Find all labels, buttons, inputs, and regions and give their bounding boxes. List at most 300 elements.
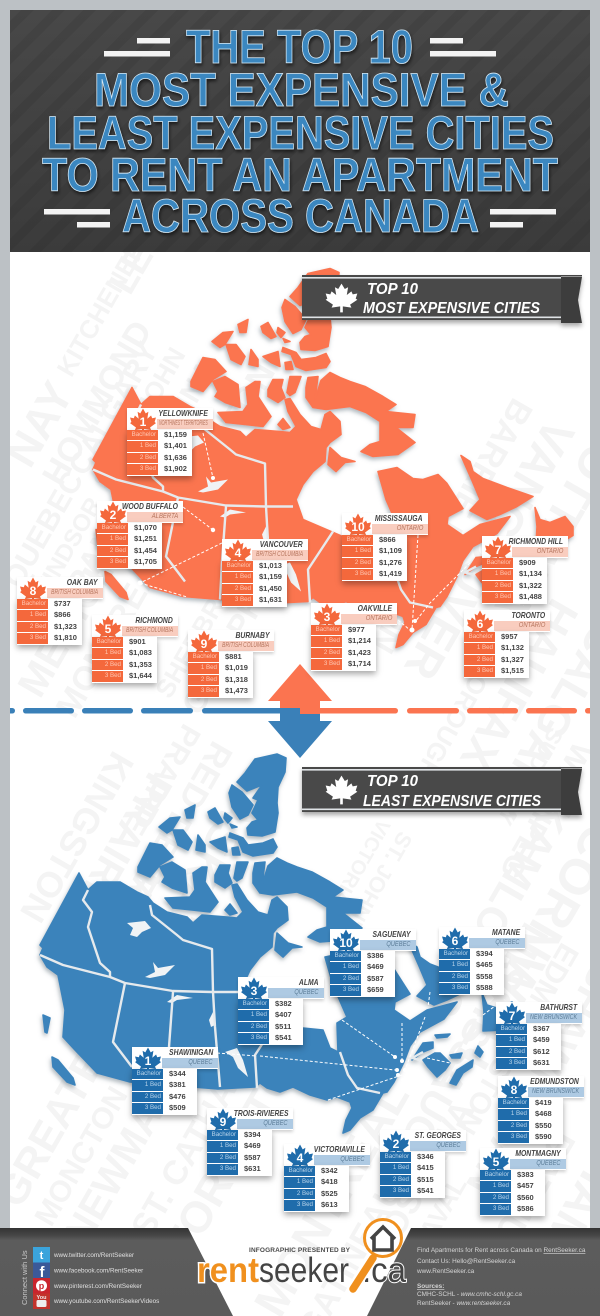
card: Bathurst	[492, 1002, 584, 1076]
card: Richmond: Bachelor	[97, 638, 121, 645]
card: Mississauga: ONTARIO	[396, 525, 423, 532]
card: Vancouver: 2 Bed	[235, 585, 251, 592]
banner: most expensive	[302, 275, 582, 323]
card: Oakville: $977	[348, 625, 365, 634]
dashed divider	[4, 708, 597, 714]
card: Vancouver: 1 Bed	[235, 573, 251, 580]
card: Matane: QUEBEC	[496, 939, 520, 946]
card: Edmundston	[494, 1076, 586, 1148]
card: Trois-Rivieres: $587	[244, 1153, 261, 1162]
card: Richmond: $901	[129, 637, 146, 646]
icon: youtube	[33, 1294, 50, 1309]
card: St. Georges: 1 Bed	[393, 1164, 409, 1171]
footer contact and sources text: CMHC-SCHL - www.cmhc-schl.gc.ca	[417, 1291, 522, 1298]
icon: youtube: You	[37, 1295, 46, 1301]
watermark of city names: HOMMOND	[35, 314, 160, 492]
card: Yellowknife: 2 Bed	[140, 454, 156, 461]
icon: twitter	[33, 1247, 50, 1262]
card: St. Georges: $346	[417, 1152, 434, 1161]
footer right panel	[367, 1228, 600, 1316]
card: Richmond Hill: 1 Bed	[495, 570, 511, 577]
card: Yellowknife: Bachelor	[132, 431, 156, 438]
banner: most expensive: TOP 10	[367, 281, 418, 298]
card: Shawinigan: $476	[169, 1092, 186, 1101]
watermark of city names: VICTORIA	[327, 816, 394, 909]
card: Wood Buffalo: 2 Bed	[110, 547, 126, 554]
arrow up, orange	[268, 664, 332, 714]
card: Victoriaville: $418	[321, 1177, 338, 1186]
card: Richmond: 2 Bed	[105, 661, 121, 668]
card: Saguenay: $587	[367, 974, 384, 983]
card: Richmond: RICHMOND	[136, 615, 173, 625]
card: St. Georges: 2 Bed	[393, 1176, 409, 1183]
card: Wood Buffalo: 1 Bed	[110, 535, 126, 542]
card: Yellowknife: $1,902	[164, 464, 187, 473]
watermark of city names: CALGARY	[62, 337, 165, 481]
logo: rentseeker.ca: seeker	[259, 1251, 349, 1290]
card: Richmond: 5	[105, 622, 111, 636]
card: Yellowknife: $1,401	[164, 441, 187, 450]
card: Saguenay: 2 Bed	[343, 975, 359, 982]
card: Matane: $465	[476, 960, 493, 969]
card: Wood Buffalo	[93, 501, 184, 576]
card: Bathurst: Bachelor	[501, 1025, 525, 1032]
card: Yellowknife	[123, 408, 214, 483]
card: Vancouver	[218, 539, 310, 614]
card: St. Georges: QUEBEC	[437, 1142, 461, 1149]
card: Burnaby	[184, 630, 276, 705]
watermark of city names: SAINT JOHN	[87, 342, 191, 493]
title: THE TOP 10	[186, 20, 413, 73]
card: Shawinigan	[128, 1047, 220, 1122]
card: Saguenay: SAGUENAY	[373, 929, 411, 939]
watermark of city names: MONCTON	[29, 1081, 134, 1232]
card: Trois-Rivieres: TROIS-RIVIERES	[233, 1108, 288, 1118]
icon: twitter: t	[40, 1250, 44, 1262]
city dots, blue map	[393, 1055, 407, 1082]
card: Edmundston: $468	[535, 1109, 552, 1118]
card: Richmond: BRITISH COLUMBIA	[126, 627, 173, 634]
watermark of city names: ST. CATHARINES	[124, 983, 296, 1244]
footer left panel	[0, 1228, 233, 1316]
logo: rentseeker.ca: rent	[197, 1251, 259, 1290]
card: Montmagny: $383	[517, 1170, 534, 1179]
card: Wood Buffalo: WOOD BUFFALO	[122, 501, 178, 511]
watermark of city names: REGINA	[137, 354, 224, 472]
card: Oak Bay: $1,323	[54, 622, 77, 631]
card: Oak Bay: $737	[54, 599, 71, 608]
card: Victoriaville	[280, 1144, 372, 1219]
social links: www.twitter.com/RentSeeker	[53, 1252, 134, 1259]
card: Edmundston: $419	[535, 1098, 552, 1107]
card: Saguenay	[326, 929, 418, 1004]
card: Victoriaville: 4	[297, 1150, 303, 1164]
watermark of city names: KITCHENER	[51, 235, 152, 381]
icon: facebook: f	[40, 1264, 46, 1281]
card: Bathurst: $459	[533, 1035, 550, 1044]
card: Edmundston: EDMUNDSTON	[530, 1076, 579, 1086]
watermark of city names: EDMUNDSTON	[449, 938, 585, 1140]
icon: pinterest	[33, 1278, 50, 1294]
card: Matane: 3 Bed	[452, 984, 468, 991]
card: Bathurst: $612	[533, 1047, 550, 1056]
card: Mississauga: $1,276	[379, 558, 402, 567]
card: Alma: $541	[275, 1033, 292, 1042]
card: Montmagny: $560	[517, 1193, 534, 1202]
card: Matane: $588	[476, 983, 493, 992]
card: Matane: $394	[476, 949, 493, 958]
card: Victoriaville: VICTORIAVILLE	[314, 1144, 365, 1154]
card: Toronto: $1,515	[501, 666, 524, 675]
card: Alma: ALMA	[299, 977, 319, 987]
card: Richmond Hill: $909	[519, 558, 536, 567]
card: Toronto: $1,132	[501, 643, 524, 652]
title decoration bars	[44, 38, 556, 228]
card: Wood Buffalo: $1,251	[134, 534, 157, 543]
card: Trois-Rivieres: $394	[244, 1130, 261, 1139]
card: Bathurst: 3 Bed	[509, 1059, 525, 1066]
watermark of city names: SUDBURY	[492, 724, 568, 830]
logo: rentseeker.ca	[197, 1251, 406, 1290]
card: Oakville	[307, 603, 398, 678]
card: Burnaby: 1 Bed	[201, 664, 217, 671]
social links	[53, 1252, 159, 1305]
card: Bathurst: 2 Bed	[509, 1048, 525, 1055]
card: Vancouver: $1,013	[259, 561, 282, 570]
watermark of city names	[10, 252, 590, 1316]
card: Yellowknife: 1	[140, 414, 146, 428]
card: Yellowknife: $1,636	[164, 453, 187, 462]
watermark of city names: LETHBRIDGE	[101, 66, 261, 301]
card: Vancouver: VANCOUVER	[260, 539, 303, 549]
left and right page edge strips	[0, 690, 600, 1228]
card: Burnaby: $1,473	[225, 686, 248, 695]
card: Vancouver: 3 Bed	[235, 596, 251, 603]
card: Burnaby: BRITISH COLUMBIA	[222, 642, 269, 649]
card: Richmond Hill: 7	[495, 542, 501, 556]
icon: facebook	[33, 1262, 50, 1281]
card: Shawinigan: QUEBEC	[189, 1059, 213, 1066]
card: Alma: Bachelor	[243, 1000, 267, 1007]
card: Montmagny: $586	[517, 1204, 534, 1213]
card: Toronto: $957	[501, 632, 518, 641]
card: Montmagny: 3 Bed	[493, 1205, 509, 1212]
watermark of city names: VANCOUVER	[395, 411, 585, 689]
card: Yellowknife: $1,159	[164, 430, 187, 439]
card: Alma: 3 Bed	[251, 1034, 267, 1041]
watermark of city names: ST. JOHN'S	[336, 828, 417, 943]
card: Oak Bay: BRITISH COLUMBIA	[51, 589, 98, 596]
social links: www.facebook.com/RentSeeker	[53, 1268, 143, 1274]
card: Saguenay: 10	[339, 936, 353, 950]
card: Edmundston: $550	[535, 1121, 552, 1130]
card: Toronto: 1 Bed	[477, 644, 493, 651]
orange map of Canada	[93, 268, 573, 648]
footer contact and sources text	[416, 1247, 586, 1307]
card: Edmundston: 2 Bed	[511, 1122, 527, 1129]
card: Oakville: $1,714	[348, 659, 371, 668]
footer contact and sources text: Find Apartments for Rent across Canada on RentSeeker.ca	[417, 1247, 586, 1254]
watermark of city names: MISSISSAUGA	[378, 916, 556, 1180]
card: Richmond Hill: $1,134	[519, 569, 542, 578]
card: St. Georges	[376, 1130, 468, 1205]
card: Alma: 2 Bed	[251, 1023, 267, 1030]
card: Richmond Hill: $1,488	[519, 592, 542, 601]
card: Saguenay: $469	[367, 962, 384, 971]
card: Oakville: Bachelor	[316, 626, 340, 633]
card: Oak Bay: $1,810	[54, 633, 77, 642]
watermark of city names: SASKATOON	[89, 754, 286, 1043]
title: MOST EXPENSIVE &	[94, 63, 509, 116]
watermark of city names: RED DEER	[119, 735, 240, 906]
card: Vancouver: $1,631	[259, 595, 282, 604]
watermark of city names: EDMONTON	[151, 356, 283, 546]
card: Mississauga	[338, 513, 430, 588]
card: Burnaby: BURNABY	[235, 630, 269, 640]
card: St. Georges: $541	[417, 1186, 434, 1195]
card: Oakville: 1 Bed	[324, 637, 340, 644]
social links: www.pinterest.com/RentSeeker	[53, 1283, 142, 1290]
card: Montmagny: 5	[493, 1154, 499, 1168]
card: Vancouver: $1,450	[259, 584, 282, 593]
card: Vancouver: $1,159	[259, 572, 282, 581]
card: Trois-Rivieres: $631	[244, 1164, 261, 1173]
card: Saguenay: QUEBEC	[387, 941, 411, 948]
icon: pinterest: p	[39, 1281, 45, 1291]
card: Toronto: ONTARIO	[518, 622, 545, 629]
card: Alma: 1 Bed	[251, 1011, 267, 1018]
card: Victoriaville: 2 Bed	[297, 1190, 313, 1197]
card: Oakville: OAKVILLE	[358, 603, 392, 613]
card: Trois-Rivieres: 2 Bed	[220, 1154, 236, 1161]
card: St. Georges: $415	[417, 1163, 434, 1172]
card: Mississauga: 1 Bed	[355, 547, 371, 554]
card: Yellowknife: YELLOWKNIFE	[159, 408, 208, 418]
card: Montmagny: MONTMAGNY	[516, 1148, 561, 1158]
card: Richmond Hill: $1,322	[519, 581, 542, 590]
watermark of city names: SHERBROOKE	[149, 527, 268, 703]
dashed leader lines, blue map	[217, 992, 495, 1100]
card: Yellowknife: 1 Bed	[140, 442, 156, 449]
card: Oak Bay: OAK BAY	[67, 577, 98, 587]
card: Edmundston: 3 Bed	[511, 1133, 527, 1140]
card: Saguenay: $659	[367, 985, 384, 994]
card: Oakville: 2 Bed	[324, 649, 340, 656]
blue map of Canada	[40, 754, 520, 1133]
card: Shawinigan: $381	[169, 1080, 186, 1089]
watermark of city names: BRANDON	[46, 455, 166, 624]
card: Matane: 1 Bed	[452, 961, 468, 968]
card: Richmond: $1,644	[129, 671, 152, 680]
card: Toronto: $1,327	[501, 655, 524, 664]
card: Matane	[435, 927, 526, 1002]
banner: least expensive: LEAST EXPENSIVE CITIES	[363, 793, 542, 810]
card: Edmundston: 8	[511, 1082, 517, 1096]
card: Saguenay: $386	[367, 951, 384, 960]
card: Oakville: ONTARIO	[365, 615, 392, 622]
card: Vancouver: 4	[235, 546, 241, 560]
card: Bathurst: BATHURST	[540, 1002, 577, 1012]
card: Montmagny: QUEBEC	[537, 1160, 561, 1167]
card: Bathurst: 1 Bed	[509, 1036, 525, 1043]
watermark of city names: HALIFAX	[451, 591, 587, 779]
social links: www.youtube.com/RentSeekerVideos	[53, 1298, 159, 1305]
card: Bathurst: 7	[509, 1008, 515, 1022]
card: Edmundston: NEW BRUNSWICK	[532, 1088, 579, 1095]
card: Richmond Hill: RICHMOND HILL	[509, 536, 563, 546]
card: Saguenay: 3 Bed	[343, 986, 359, 993]
card: Trois-Rivieres: 3 Bed	[220, 1165, 236, 1172]
watermark of city names: OSHAWA	[374, 1094, 482, 1244]
watermark of city names: KINGSTON	[12, 745, 142, 929]
watermark of city names: LAVAL	[405, 1171, 473, 1258]
banner: least expensive: TOP 10	[367, 773, 418, 790]
card: St. Georges: 3 Bed	[393, 1187, 409, 1194]
card: Mississauga: MISSISSAUGA	[375, 513, 423, 523]
card: Montmagny: Bachelor	[485, 1171, 509, 1178]
card: Matane: Bachelor	[444, 950, 468, 957]
footer contact and sources text: Sources:	[417, 1283, 444, 1290]
card: Trois-Rivieres: $469	[244, 1141, 261, 1150]
card: Richmond: 3 Bed	[105, 672, 121, 679]
card: Wood Buffalo: 2	[110, 508, 116, 522]
card: Toronto: 2 Bed	[477, 656, 493, 663]
card: Shawinigan: Bachelor	[137, 1070, 161, 1077]
card: Oak Bay: $866	[54, 610, 71, 619]
card: Oakville: $1,214	[348, 636, 371, 645]
card: Matane: 6	[452, 934, 458, 948]
card: Alma: $511	[275, 1022, 291, 1031]
card: Vancouver: Bachelor	[227, 562, 251, 569]
card: Toronto: 3 Bed	[477, 667, 493, 674]
watermark of city names: GUELPH	[174, 587, 272, 720]
card: Oak Bay: 2 Bed	[30, 623, 46, 630]
card: Toronto	[460, 610, 552, 685]
card: Mississauga: 2 Bed	[355, 559, 371, 566]
card: Matane: $558	[476, 972, 493, 981]
card: Vancouver: BRITISH COLUMBIA	[256, 551, 303, 558]
card: Burnaby: $1,019	[225, 663, 248, 672]
watermark of city names: BARRIE LONDON	[363, 392, 540, 660]
card: Oakville: 3 Bed	[324, 660, 340, 667]
card: Edmundston: 1 Bed	[511, 1110, 527, 1117]
card: Richmond	[88, 615, 180, 690]
card: Shawinigan: $509	[169, 1103, 186, 1112]
card: St. Georges: ST. GEORGES	[415, 1130, 461, 1140]
card: Shawinigan: 1	[145, 1054, 151, 1068]
card: Shawinigan: SHAWINIGAN	[169, 1047, 213, 1057]
white content panel	[10, 252, 590, 1316]
arrow down, blue	[268, 708, 332, 758]
card: Wood Buffalo: $1,705	[134, 557, 157, 566]
card: Alma: QUEBEC	[295, 989, 319, 996]
banner: least expensive	[302, 767, 582, 815]
card: Trois-Rivieres: 9	[220, 1114, 226, 1128]
card: Mississauga: $1,419	[379, 569, 402, 578]
footer contact and sources text: Contact Us: Hello@RentSeeker.ca	[417, 1258, 516, 1265]
watermark of city names: TORONTO	[154, 1053, 306, 1267]
card: Bathurst: $631	[533, 1058, 550, 1067]
watermark of city names: PRAIRIE	[61, 766, 180, 928]
presented by label: INFOGRAPHIC PRESENTED BY	[249, 1247, 351, 1254]
card: Montmagny: 1 Bed	[493, 1182, 509, 1189]
card: Shawinigan: 1 Bed	[145, 1081, 161, 1088]
card: Edmundston: $590	[535, 1132, 552, 1141]
card: Mississauga: 3 Bed	[355, 570, 371, 577]
watermark of city names: KAMLOOPS	[419, 792, 581, 1025]
card: Victoriaville: $342	[321, 1166, 338, 1175]
card: Victoriaville: $525	[321, 1189, 338, 1198]
card: Bathurst: $367	[533, 1024, 550, 1033]
card: Wood Buffalo: ALBERTA	[151, 513, 178, 520]
card: Saguenay: 1 Bed	[343, 963, 359, 970]
card: Wood Buffalo: 3 Bed	[110, 558, 126, 565]
card: Burnaby: 9	[201, 636, 207, 650]
card: Mississauga: Bachelor	[347, 536, 371, 543]
watermark of city names: NEWMARKET	[56, 1002, 226, 1252]
watermark of city names: BATHURST	[451, 1123, 584, 1313]
card: Richmond Hill: 3 Bed	[495, 593, 511, 600]
card: Shawinigan: 3 Bed	[145, 1104, 161, 1111]
watermark of city names: QUEBEC	[0, 466, 90, 594]
card: Alma: $382	[275, 999, 292, 1008]
card: Oak Bay: 1 Bed	[30, 611, 46, 618]
card: Toronto: TORONTO	[511, 610, 545, 620]
card: Alma: 3	[251, 984, 257, 998]
card: Richmond: $1,353	[129, 660, 152, 669]
card: Toronto: Bachelor	[469, 633, 493, 640]
card: Trois-Rivieres: 1 Bed	[220, 1142, 236, 1149]
card: Alma: $407	[275, 1010, 292, 1019]
card: Oakville: $1,423	[348, 648, 371, 657]
card: Richmond Hill: ONTARIO	[536, 548, 563, 555]
card: Trois-Rivieres: QUEBEC	[264, 1120, 288, 1127]
card: Richmond Hill	[478, 536, 570, 610]
footer contact and sources text: RentSeeker - www.rentseeker.ca	[417, 1300, 511, 1307]
card: Victoriaville: 3 Bed	[297, 1201, 313, 1208]
card: Richmond Hill: 2 Bed	[495, 582, 511, 589]
watermark of city names: PETERBOROUGH	[409, 577, 547, 785]
card: Montmagny	[476, 1148, 568, 1223]
card: Bathurst: NEW BRUNSWICK	[530, 1014, 577, 1021]
card: Burnaby: $881	[225, 652, 242, 661]
card: Yellowknife: NORTHWEST TERRITORIES	[159, 420, 208, 427]
card: Mississauga: $866	[379, 535, 396, 544]
card: Mississauga: 10	[351, 520, 365, 534]
logo: rentseeker.ca: .ca	[362, 1251, 406, 1290]
card: Richmond Hill: Bachelor	[487, 559, 511, 566]
card: Wood Buffalo: Bachelor	[102, 524, 126, 531]
card: Trois-Rivieres	[203, 1108, 294, 1183]
card: Oakville: 3	[324, 610, 330, 624]
banner: most expensive: MOST EXPENSIVE CITIES	[363, 300, 541, 317]
watermark of city names: PRAIRIE	[117, 718, 207, 840]
card: Mississauga: $1,109	[379, 546, 402, 555]
card: Oak Bay: 8	[30, 584, 36, 598]
card: Montmagny: $457	[517, 1181, 534, 1190]
card: Oak Bay	[13, 577, 104, 652]
card: Burnaby: $1,318	[225, 675, 248, 684]
card: Richmond: 1 Bed	[105, 649, 121, 656]
card: Shawinigan: 2 Bed	[145, 1093, 161, 1100]
watermark of city names: HALIFAX	[65, 848, 177, 1001]
card: Richmond: $1,083	[129, 648, 152, 657]
dashed leader lines, orange map	[140, 433, 470, 630]
card: Burnaby: Bachelor	[193, 653, 217, 660]
icon: magnifier with house	[353, 1220, 402, 1289]
card: Trois-Rivieres: Bachelor	[212, 1131, 236, 1138]
card: Oak Bay: Bachelor	[22, 600, 46, 607]
